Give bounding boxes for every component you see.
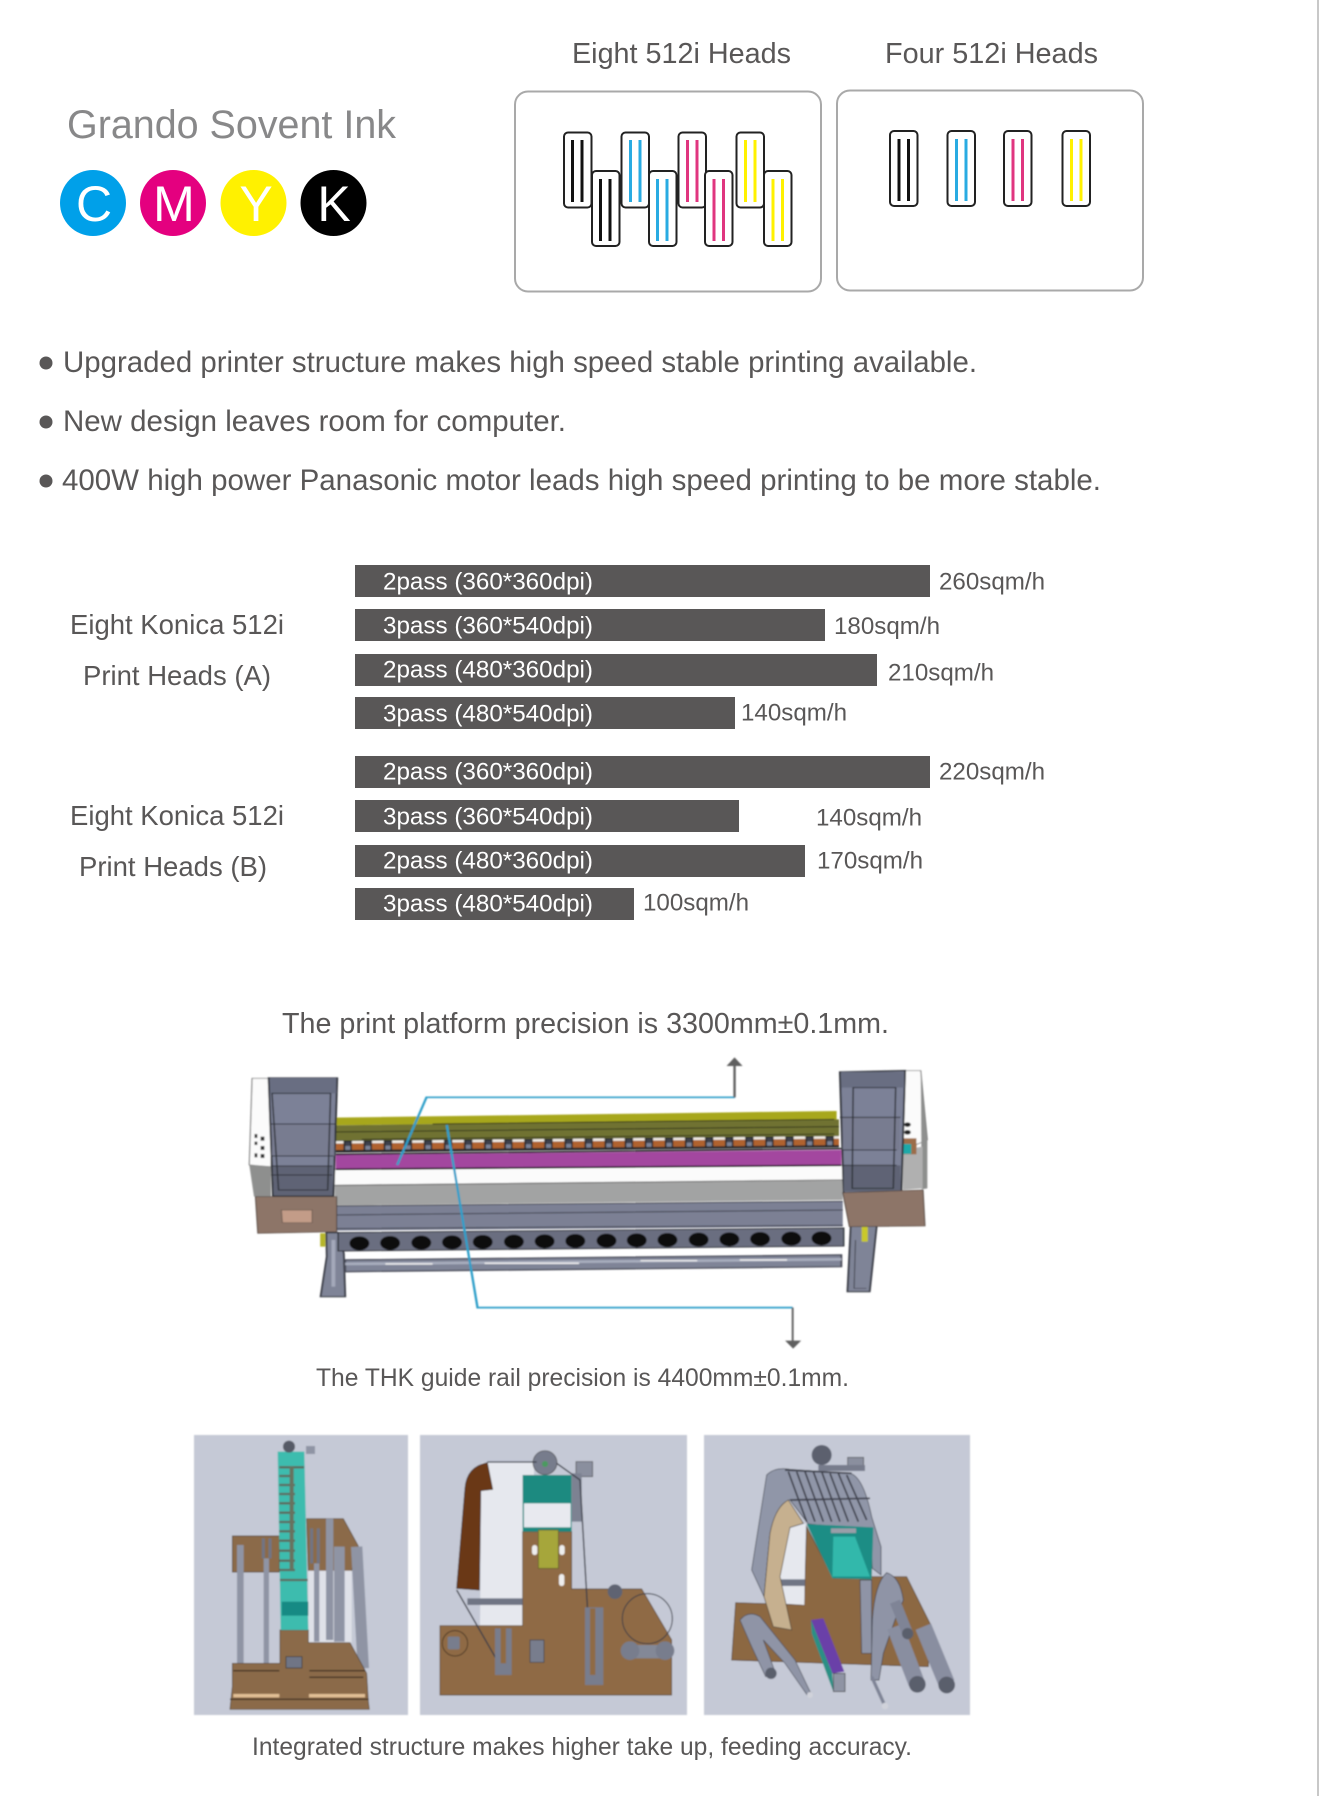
bar: A 2pass 360x360 <box>355 565 1045 597</box>
olive top beam <box>333 1111 837 1125</box>
bar: A 3pass 480x540: 3pass (480*540dpi) <box>383 700 593 728</box>
photo panel: perspective view <box>704 1435 970 1715</box>
suction hole band <box>338 1228 844 1251</box>
bullet list <box>40 346 1101 497</box>
bar: B 2pass 360x360: 220sqm/h <box>939 758 1045 786</box>
label: Eight Konica 512i Print Heads (B): Eight Konica 512i <box>70 800 284 831</box>
tan media sheet <box>764 1500 803 1630</box>
callout line: platform <box>397 1097 735 1165</box>
front slate panel <box>336 1201 843 1231</box>
bar: B 2pass 480x360 <box>355 845 923 877</box>
bar: B 2pass 480x360: 2pass (480*360dpi) <box>383 848 593 874</box>
arrow: down <box>785 1308 801 1349</box>
left brown box <box>255 1197 337 1233</box>
bar: B 2pass 360x360 <box>355 756 1045 788</box>
icon: yellow ink <box>220 170 286 236</box>
photo panel: side view <box>420 1435 687 1715</box>
left leg <box>320 1233 345 1297</box>
printer illustration <box>249 1057 927 1349</box>
label: Eight Konica 512i Print Heads (B): Print Heads (B) <box>79 851 267 882</box>
CMYK ink circles <box>60 170 366 236</box>
bar: A 2pass 360x360: 260sqm/h <box>939 568 1045 596</box>
dark brown media guide <box>457 1463 493 1590</box>
bar chart: group A speeds <box>355 565 1045 729</box>
heading: Four 512i Heads: Four 512i Heads <box>885 38 1098 70</box>
bar: B 3pass 480x540: 100sqm/h <box>643 890 749 916</box>
feed bar <box>467 1598 523 1605</box>
bar: A 3pass 360x540: 3pass (360*540dpi) <box>383 612 593 640</box>
icon: black ink <box>300 170 366 236</box>
slots and rollers <box>442 1584 674 1685</box>
label: Eight Konica 512i Print Heads (A): Print Heads (A) <box>83 660 271 691</box>
photo panel: side front view <box>194 1435 408 1715</box>
take-up rod <box>345 1255 841 1272</box>
icon: black ink: K <box>317 176 351 232</box>
bar chart: group B speeds <box>355 756 1045 920</box>
grey web sweep <box>860 1573 903 1680</box>
bar: A 3pass 360x540 <box>355 609 940 641</box>
label: Eight Konica 512i Print Heads (A): Eight Konica 512i <box>70 609 284 640</box>
wheel and sensor <box>812 1445 865 1471</box>
magenta platform <box>336 1149 841 1169</box>
bar: B 2pass 480x360: 170sqm/h <box>817 848 923 874</box>
bar: B 3pass 480x540: 3pass (480*540dpi) <box>383 890 593 918</box>
bar: B 3pass 360x540: 3pass (360*540dpi) <box>383 804 593 830</box>
bar: B 3pass 360x540 <box>355 800 922 832</box>
bar: A 2pass 480x360 <box>355 654 994 686</box>
teal hood <box>807 1524 873 1579</box>
bar: B 3pass 480x540 <box>355 888 749 920</box>
caption: THK guide rail precision: The THK guide rail precision is 4400mm±0.1mm. <box>316 1364 849 1392</box>
label: Eight Konica 512i Print Heads (A) <box>70 609 284 691</box>
brown frame <box>732 1527 930 1667</box>
bar: B 3pass 360x540: 140sqm/h <box>816 804 922 832</box>
right brown box <box>843 1190 925 1227</box>
icon: yellow ink: Y <box>239 176 273 232</box>
icon: cyan ink: C <box>76 176 112 232</box>
print head carriage row <box>336 1136 839 1153</box>
white opening <box>772 1523 806 1605</box>
caption: print platform precision: The print platform precision is 3300mm±0.1mm. <box>282 1008 889 1040</box>
label: Eight Konica 512i Print Heads (B) <box>70 800 284 882</box>
rail bar <box>777 1579 805 1586</box>
icon: cyan ink <box>60 170 126 236</box>
slatted grid <box>785 1470 870 1522</box>
light gap <box>308 1571 352 1643</box>
guide rods <box>240 1519 363 1668</box>
arrow: up <box>727 1057 743 1097</box>
heading: Eight 512i Heads: Eight 512i Heads <box>572 38 791 70</box>
rollers <box>872 1602 947 1706</box>
panel: eight print heads <box>515 92 821 292</box>
caption: integrated structure: Integrated structure makes higher take up, feeding accuracy. <box>252 1733 912 1761</box>
bullet 3: 400W high power Panasonic motor leads high speed printing to be more stable. <box>62 464 1101 497</box>
teal column <box>278 1452 308 1630</box>
roller ends <box>765 1628 955 1709</box>
bar: A 3pass 360x540: 180sqm/h <box>834 613 940 640</box>
grey platen <box>335 1180 843 1205</box>
wheel and sensor <box>457 1451 593 1680</box>
bullet 1: Upgraded printer structure makes high speed stable printing available. <box>63 346 977 379</box>
bar: A 2pass 480x360: 2pass (480*360dpi) <box>383 656 593 684</box>
title: Grando Sovent Ink: Grando Sovent Ink <box>67 103 396 147</box>
bullet 2: New design leaves room for computer. <box>63 405 566 438</box>
left roller cone <box>740 1614 812 1697</box>
base <box>230 1630 369 1709</box>
icon: magenta ink: M <box>153 176 195 232</box>
callout line: guide rail <box>447 1125 793 1308</box>
left housing <box>249 1078 337 1197</box>
purple bar <box>811 1618 845 1692</box>
white platen <box>335 1167 843 1185</box>
right leg <box>847 1225 877 1292</box>
bar: A 3pass 480x540: 140sqm/h <box>741 700 847 726</box>
brown frame <box>440 1532 672 1695</box>
grey media sheet <box>752 1469 881 1597</box>
bar: A 2pass 360x360: 2pass (360*360dpi) <box>383 568 593 596</box>
olive beam lower <box>332 1119 839 1142</box>
panel: four print heads <box>837 90 1143 290</box>
right housing <box>840 1071 927 1193</box>
icon: magenta ink <box>140 170 206 236</box>
bar: B 2pass 360x360: 2pass (360*360dpi) <box>383 758 593 786</box>
bar: A 2pass 480x360: 210sqm/h <box>888 660 994 686</box>
teal box <box>523 1475 572 1532</box>
wheel <box>283 1441 315 1454</box>
back plates <box>232 1519 358 1572</box>
bar: A 3pass 480x540 <box>355 697 847 729</box>
white interior <box>480 1463 534 1626</box>
olive bracket <box>532 1530 565 1586</box>
